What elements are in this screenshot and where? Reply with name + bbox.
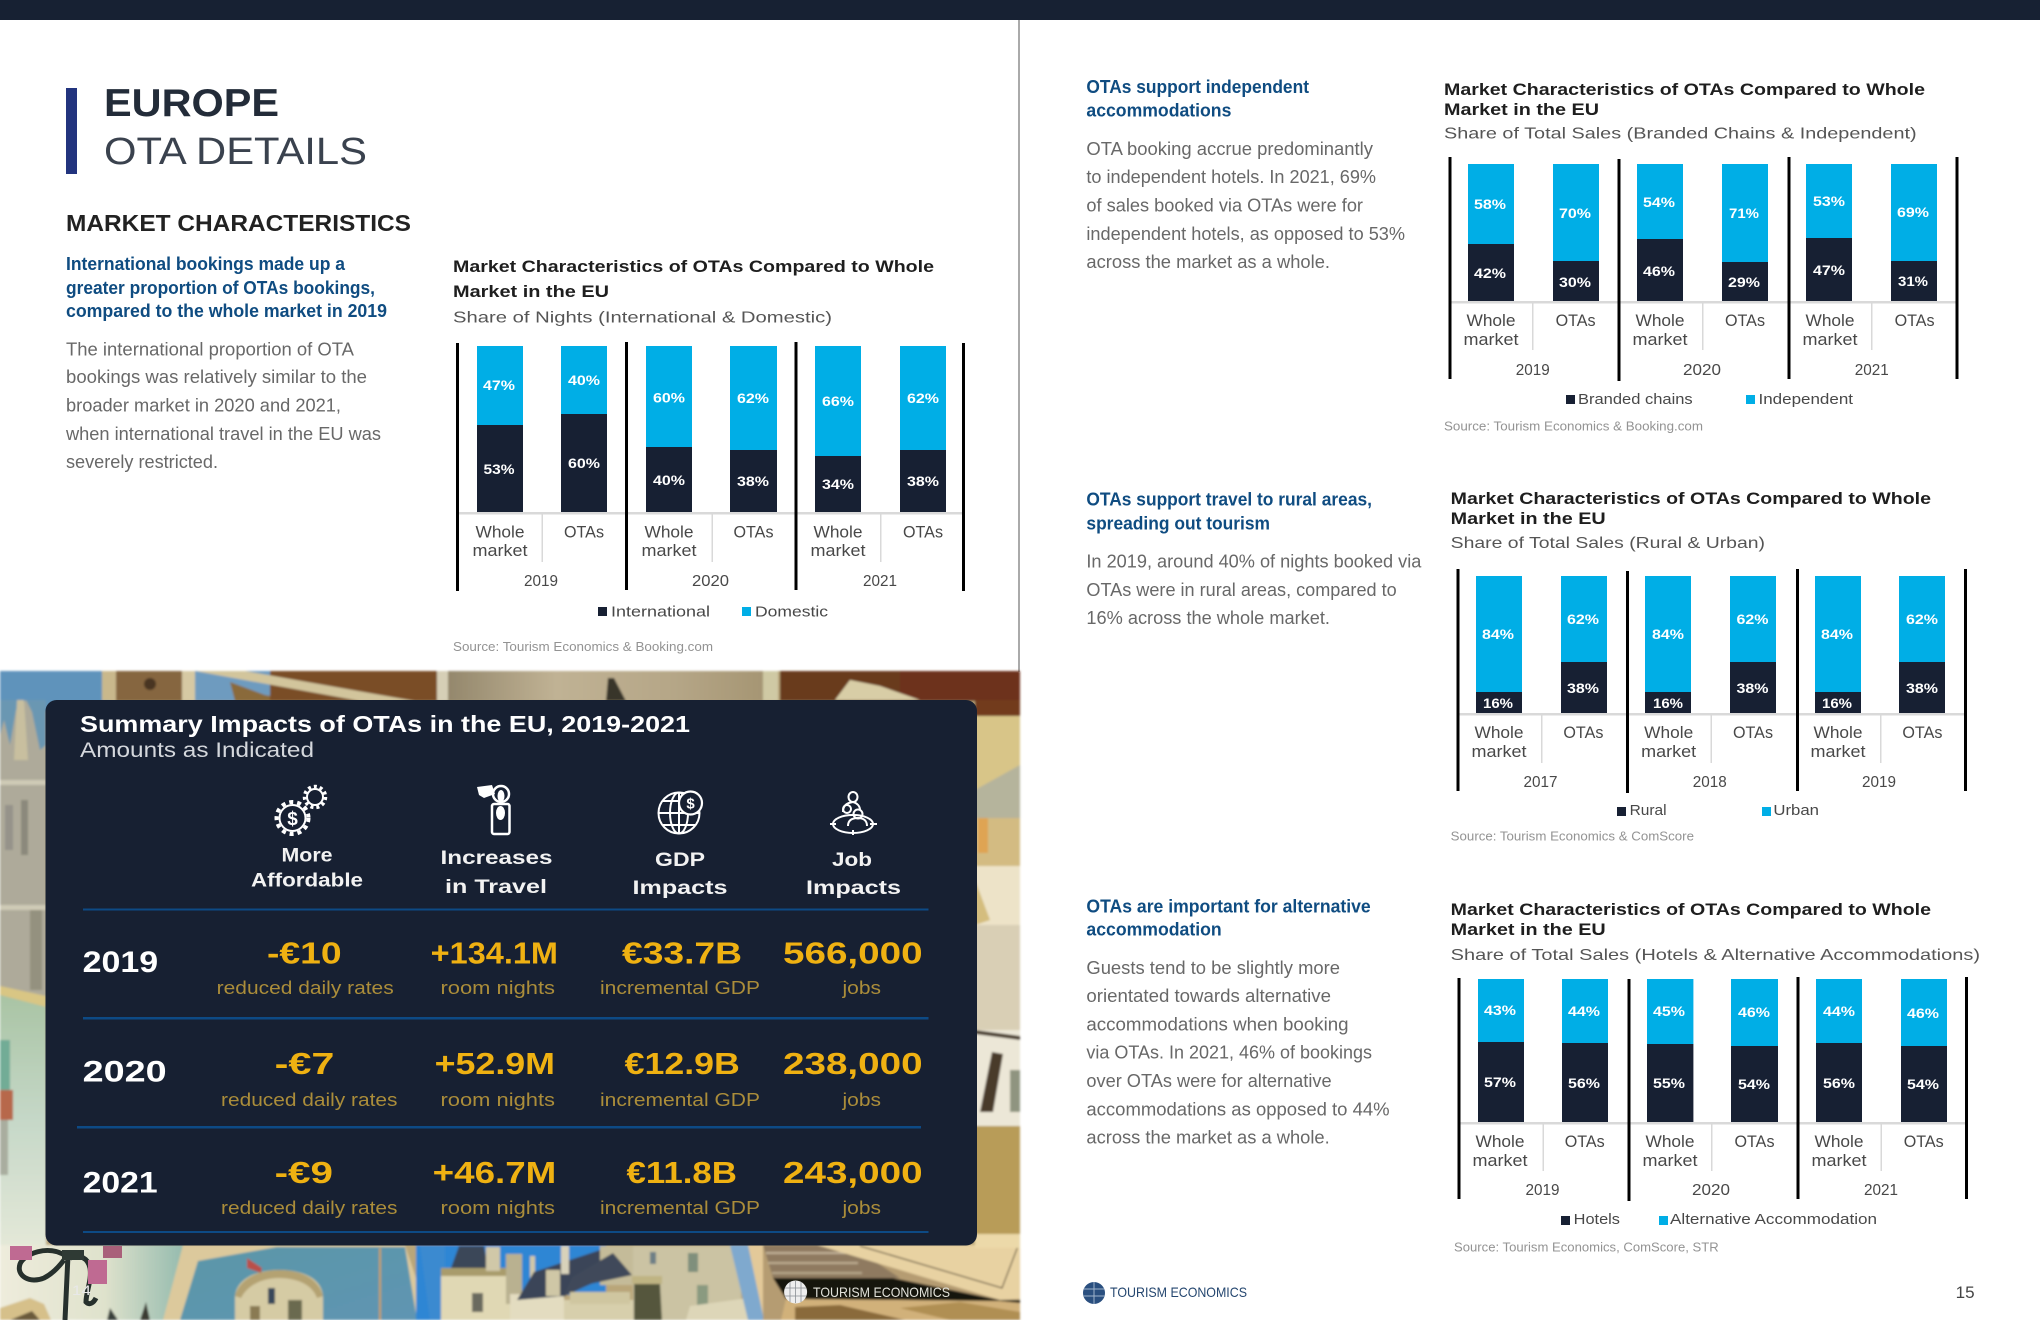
axes and category labels: market xyxy=(1632,330,1688,349)
stacked bars: 16% xyxy=(1653,695,1684,711)
legend xyxy=(1561,1211,1877,1228)
bottom left xyxy=(0,1245,190,1320)
chart heading xyxy=(1444,80,1925,143)
legend: Urban xyxy=(1773,802,1819,819)
pisa card xyxy=(163,1245,430,1320)
stacked bars: 56% xyxy=(1568,1075,1601,1091)
callout heading: OTAs support travel to rural areas, xyxy=(1086,490,1372,510)
axes and category labels: Whole xyxy=(1814,1132,1864,1151)
axes and category labels: Whole xyxy=(1636,311,1684,330)
row: 2020: reduced daily rates xyxy=(221,1090,398,1110)
axes and category labels: Whole xyxy=(814,523,862,542)
stacked bars: 46% xyxy=(1907,1005,1940,1021)
chart heading: Share of Nights (International & Domestic) xyxy=(453,310,832,327)
body copy: In 2019, around 40% of nights booked via xyxy=(1086,552,1422,572)
source note: Source: Tourism Economics & Booking.com xyxy=(453,639,713,654)
stacked bars: 56% xyxy=(1823,1075,1856,1091)
legend: Alternative Accommodation xyxy=(1670,1211,1877,1228)
legend: Branded chains xyxy=(1578,391,1693,408)
icon: globe xyxy=(784,1280,807,1304)
chart heading: Market Characteristics of OTAs Compared to Whole xyxy=(1444,80,1925,99)
section heading: MARKET CHARACTERISTICS xyxy=(66,210,411,236)
stacked bars: 71% xyxy=(1729,205,1760,221)
icon: hand with luggage tag xyxy=(477,785,510,834)
axes and category labels: 2021 xyxy=(1855,362,1889,379)
axes and category labels: Whole xyxy=(1466,311,1516,330)
row: 2021: jobs xyxy=(841,1198,881,1218)
callout heading: OTAs support independent xyxy=(1086,77,1309,97)
stacked bars: 43% xyxy=(1484,1002,1517,1018)
logo wordmark: TOURISM ECONOMICS xyxy=(1110,1284,1247,1300)
row: 2021: 2021 xyxy=(83,1166,158,1199)
stacked bars: 42% xyxy=(1474,265,1507,281)
row: 2019: -€10 xyxy=(267,936,342,970)
chart heading: Market in the EU xyxy=(1451,920,1606,939)
top strip xyxy=(0,671,110,711)
column headers: in Travel xyxy=(445,877,547,898)
axes and category labels: Whole xyxy=(1814,723,1862,742)
axes and category labels: 2019 xyxy=(1516,362,1550,379)
chart heading: Share of Total Sales (Hotels & Alternative Accommodations) xyxy=(1451,947,1980,964)
legend: International xyxy=(611,604,710,621)
row: 2019: incremental GDP xyxy=(600,978,760,998)
stacked bars: 54% xyxy=(1738,1076,1771,1092)
panel: summary impacts xyxy=(46,700,977,1246)
chart heading: Market Characteristics of OTAs Compared to Whole xyxy=(453,257,934,276)
callout heading: accommodations xyxy=(1086,101,1231,121)
stacked bars: 16% xyxy=(1483,695,1514,711)
body copy: orientated towards alternative xyxy=(1086,986,1331,1006)
stacked bars xyxy=(1476,576,1945,713)
icon: globe with coin xyxy=(658,792,702,834)
row: 2021: €11.8B xyxy=(626,1155,737,1190)
stacked bars: 57% xyxy=(1484,1074,1517,1090)
axes and category labels: OTAs xyxy=(903,523,943,542)
row: 2019: €33.7B xyxy=(622,936,742,970)
body copy: across the market as a whole. xyxy=(1086,1128,1330,1148)
axes and category labels: OTAs xyxy=(1565,1132,1605,1151)
chart: rural vs urban xyxy=(1451,489,1967,844)
axes and category labels: Whole xyxy=(1646,1132,1694,1151)
left page footer logo xyxy=(784,1280,950,1304)
axes and category labels: Whole xyxy=(1806,311,1854,330)
row: 2019: reduced daily rates xyxy=(217,978,394,998)
castle photo xyxy=(416,1245,606,1295)
stacked bars: 84% xyxy=(1821,626,1854,642)
column headers: More xyxy=(282,846,332,867)
stacked bars: 46% xyxy=(1643,263,1676,279)
chart heading xyxy=(1451,900,1980,964)
stacked bars: 55% xyxy=(1653,1075,1686,1091)
legend: Rural xyxy=(1630,802,1667,819)
chart heading: Market in the EU xyxy=(1444,100,1599,119)
title accent bar xyxy=(66,88,77,174)
chart: hotels vs alternative accommodation xyxy=(1451,900,1980,1255)
stacked bars: 53% xyxy=(484,461,515,477)
axes and category labels: market xyxy=(1641,742,1696,761)
legend: Hotels xyxy=(1574,1211,1620,1228)
axes and category labels: Whole xyxy=(1644,723,1693,742)
axes and category labels: OTAs xyxy=(1556,311,1596,330)
left edge xyxy=(0,700,46,996)
row: 2019: +134.1M xyxy=(431,936,558,970)
callout heading xyxy=(1086,490,1372,534)
text block: alternative accommodation xyxy=(1086,896,1390,1148)
row: 2021: +46.7M xyxy=(433,1155,556,1190)
chart heading: Market in the EU xyxy=(1451,509,1606,528)
axes and category labels: Whole xyxy=(1476,1132,1524,1151)
axes and category labels: market xyxy=(1472,1151,1528,1170)
axes and category labels: OTAs xyxy=(1563,723,1603,742)
icon: gears with dollar xyxy=(276,786,326,834)
axes and category labels: market xyxy=(1812,1151,1867,1170)
source note: Source: Tourism Economics, ComScore, STR xyxy=(1454,1240,1719,1255)
axes and category labels: OTAs xyxy=(1734,1132,1774,1151)
row: 2019: 566,000 xyxy=(783,936,923,970)
callout heading xyxy=(1086,896,1371,940)
body copy: severely restricted. xyxy=(66,452,218,472)
stacked bars: 47% xyxy=(483,377,516,393)
stacked bars: 31% xyxy=(1898,273,1929,289)
callout heading: OTAs are important for alternative xyxy=(1086,896,1371,916)
stacked bars: 40% xyxy=(568,372,601,388)
stacked bars: 62% xyxy=(737,390,770,406)
column headers: Impacts xyxy=(806,878,901,899)
text block: independent accommodations xyxy=(1086,77,1405,272)
panel heading: Summary Impacts of OTAs in the EU, 2019-2021 xyxy=(80,711,690,737)
axes and category labels: 2020 xyxy=(1692,1182,1730,1199)
body copy: OTA booking accrue predominantly xyxy=(1086,139,1373,159)
stacked bars: 62% xyxy=(907,390,940,406)
stacked bars: 84% xyxy=(1482,626,1515,642)
column headers xyxy=(251,846,901,899)
column headers: Impacts xyxy=(632,878,728,899)
stacked bars: 53% xyxy=(1813,193,1846,209)
street lamp xyxy=(10,1246,122,1320)
body copy xyxy=(1086,139,1405,272)
stacked bars: 62% xyxy=(1906,611,1939,627)
row: 2021: room nights xyxy=(440,1198,555,1218)
body copy: over OTAs were for alternative xyxy=(1086,1071,1332,1091)
axes and category labels: market xyxy=(1810,742,1866,761)
axes and category labels: 2019 xyxy=(524,573,558,590)
axes and category labels: 2021 xyxy=(863,573,897,590)
stacked bars: 62% xyxy=(1567,611,1600,627)
body copy: independent hotels, as opposed to 53% xyxy=(1086,224,1405,244)
panel heading xyxy=(80,711,690,762)
body copy: bookings was relatively similar to the xyxy=(66,367,367,387)
page title xyxy=(66,82,367,174)
legend: Domestic xyxy=(755,604,829,621)
icon: globe xyxy=(1083,1282,1105,1304)
axes and category labels: OTAs xyxy=(734,523,774,542)
chart heading: Market in the EU xyxy=(453,282,609,301)
body copy: accommodations as opposed to 44% xyxy=(1086,1100,1390,1120)
stacked bars xyxy=(1478,979,1947,1122)
body copy xyxy=(1086,958,1390,1148)
right page footer logo xyxy=(1083,1282,1247,1304)
source note: Source: Tourism Economics & Booking.com xyxy=(1444,419,1703,434)
title line: OTA Details: OTA DETAILS xyxy=(104,131,367,173)
body copy: The international proportion of OTA xyxy=(66,340,354,360)
body copy: accommodations when booking xyxy=(1086,1014,1349,1034)
chart heading xyxy=(1451,489,1931,552)
top bar xyxy=(0,0,2040,20)
stacked bars: 60% xyxy=(568,455,601,471)
right edge xyxy=(975,700,1020,718)
stacked bars: 46% xyxy=(1738,1004,1771,1020)
background photo collage xyxy=(0,671,1020,1320)
axes and category labels: OTAs xyxy=(1895,311,1935,330)
callout heading: International bookings made up a xyxy=(66,254,346,274)
axes and category labels: OTAs xyxy=(1904,1132,1944,1151)
axes and category labels: 2019 xyxy=(1862,774,1896,791)
axes and category labels: market xyxy=(1802,330,1858,349)
panel heading: Amounts as Indicated xyxy=(80,739,314,762)
chart: branded chains vs independent xyxy=(1444,80,1958,434)
axes and category labels xyxy=(1456,569,1967,793)
stacked bars: 38% xyxy=(1736,680,1769,696)
stacked bars: 34% xyxy=(822,476,855,492)
body copy: 16% across the whole market. xyxy=(1086,608,1330,628)
axes and category labels: market xyxy=(1464,330,1519,349)
body copy: across the market as a whole. xyxy=(1086,252,1330,272)
stacked bars: 62% xyxy=(1736,611,1769,627)
row: 2020: 238,000 xyxy=(783,1046,923,1081)
stacked bars: 38% xyxy=(1567,680,1600,696)
row: 2020: -€7 xyxy=(275,1046,334,1081)
text block: international bookings xyxy=(65,254,387,472)
body copy: via OTAs. In 2021, 46% of bookings xyxy=(1086,1042,1372,1062)
axes and category labels: 2019 xyxy=(1526,1182,1560,1199)
row: 2021: 243,000 xyxy=(783,1155,923,1190)
body copy: to independent hotels. In 2021, 69% xyxy=(1086,167,1376,187)
axes and category labels: Whole xyxy=(476,523,524,542)
axes and category labels xyxy=(1448,157,1958,381)
stacked bars: 70% xyxy=(1559,205,1592,221)
stacked bars: 84% xyxy=(1652,626,1685,642)
legend xyxy=(1617,802,1819,819)
axes and category labels: 2020 xyxy=(1683,362,1721,379)
axes and category labels: 2017 xyxy=(1524,774,1558,791)
text block: rural areas xyxy=(1086,490,1422,628)
row: 2021 xyxy=(83,1155,923,1218)
callout heading: spreading out tourism xyxy=(1086,514,1270,534)
stacked bars: 47% xyxy=(1813,262,1846,278)
axes and category labels: market xyxy=(1472,742,1527,761)
row: 2019: room nights xyxy=(440,978,555,998)
stacked bars: 44% xyxy=(1823,1003,1856,1019)
stacked bars: 29% xyxy=(1728,274,1761,290)
legend xyxy=(598,604,829,621)
chart heading: Market Characteristics of OTAs Compared to Whole xyxy=(1451,900,1931,919)
right page number: 15 xyxy=(1956,1283,1975,1302)
callout heading: greater proportion of OTAs bookings, xyxy=(66,278,375,298)
stacked bars: 40% xyxy=(653,472,686,488)
row: 2020: €12.9B xyxy=(625,1046,740,1081)
axes and category labels: 2020 xyxy=(692,573,729,590)
stacked bars: 38% xyxy=(1906,680,1939,696)
body copy xyxy=(65,340,381,472)
icon: globe with coin: $ xyxy=(686,796,695,812)
stacked bars xyxy=(1468,164,1937,301)
stacked bars: 60% xyxy=(653,390,686,406)
axes and category labels: OTAs xyxy=(1733,723,1773,742)
row: 2020: +52.9M xyxy=(435,1046,555,1081)
stacked bars: 30% xyxy=(1559,274,1592,290)
books at lower right xyxy=(763,1245,1020,1320)
row: 2020: incremental GDP xyxy=(600,1090,760,1110)
chart heading: Market Characteristics of OTAs Compared to Whole xyxy=(1451,489,1931,508)
column headers: GDP xyxy=(655,850,705,871)
logo wordmark: TOURISM ECONOMICS xyxy=(813,1284,950,1300)
axes and category labels xyxy=(1458,977,1968,1201)
axes and category labels: market xyxy=(472,541,528,560)
chart heading xyxy=(453,257,934,327)
stacked bars: 58% xyxy=(1474,196,1507,212)
stacked bars: 54% xyxy=(1643,194,1676,210)
stacked bars xyxy=(477,346,946,512)
legend: Independent xyxy=(1758,391,1854,408)
axes and category labels: OTAs xyxy=(1725,311,1765,330)
axes and category labels: 2018 xyxy=(1693,774,1727,791)
chart heading: Share of Total Sales (Branded Chains & Independent) xyxy=(1444,126,1917,143)
title line: Europe: EUROPE xyxy=(104,82,279,125)
body copy: OTAs were in rural areas, compared to xyxy=(1086,580,1397,600)
stacked bars: 66% xyxy=(822,393,855,409)
stacked bars: 54% xyxy=(1907,1076,1940,1092)
column headers: Job xyxy=(832,850,872,871)
body copy: Guests tend to be slightly more xyxy=(1086,958,1340,978)
page divider xyxy=(1018,20,1020,672)
row: 2020 xyxy=(83,1046,923,1110)
stacked bars: 38% xyxy=(907,473,940,489)
stacked bars: 45% xyxy=(1653,1003,1686,1019)
left page number: 14 xyxy=(72,1282,91,1298)
body copy xyxy=(1086,552,1422,628)
row: 2020: room nights xyxy=(440,1090,555,1110)
axes and category labels: Whole xyxy=(644,523,694,542)
legend xyxy=(1566,391,1854,408)
chart heading: Share of Total Sales (Rural & Urban) xyxy=(1451,535,1765,552)
callout heading: accommodation xyxy=(1086,920,1222,940)
icon: gears with dollar: $ xyxy=(287,809,298,830)
column headers: Increases xyxy=(440,848,552,869)
axes and category labels: Whole xyxy=(1474,723,1524,742)
stacked bars: 69% xyxy=(1897,204,1930,220)
body copy: of sales booked via OTAs were for xyxy=(1086,196,1363,216)
row: 2020: 2020 xyxy=(83,1056,167,1089)
row: 2019: jobs xyxy=(841,978,881,998)
icon: people on target xyxy=(830,792,877,835)
column headers: Affordable xyxy=(251,871,363,892)
row: 2019 xyxy=(83,936,923,998)
callout heading xyxy=(66,254,387,321)
body copy: broader market in 2020 and 2021, xyxy=(66,396,341,416)
axes and category labels: OTAs xyxy=(564,523,604,542)
callout heading xyxy=(1086,77,1309,121)
row: 2021: incremental GDP xyxy=(600,1198,760,1218)
axes and category labels: market xyxy=(1642,1151,1698,1170)
axes and category labels: market xyxy=(642,541,697,560)
chart: international vs domestic nights xyxy=(453,257,965,654)
row: 2021: -€9 xyxy=(275,1155,333,1190)
row: 2019: 2019 xyxy=(83,946,158,979)
axes and category labels: OTAs xyxy=(1902,723,1942,742)
stacked bars: 38% xyxy=(737,473,770,489)
stacked bars: 16% xyxy=(1822,695,1853,711)
axes and category labels xyxy=(456,342,965,591)
row: 2020: jobs xyxy=(841,1090,881,1110)
axes and category labels: market xyxy=(810,541,866,560)
axes and category labels: 2021 xyxy=(1864,1182,1898,1199)
source note: Source: Tourism Economics & ComScore xyxy=(1451,829,1694,844)
callout heading: compared to the whole market in 2019 xyxy=(66,301,387,321)
body copy: when international travel in the EU was xyxy=(65,424,381,444)
stacked bars: 44% xyxy=(1568,1003,1601,1019)
row: 2021: reduced daily rates xyxy=(221,1198,398,1218)
